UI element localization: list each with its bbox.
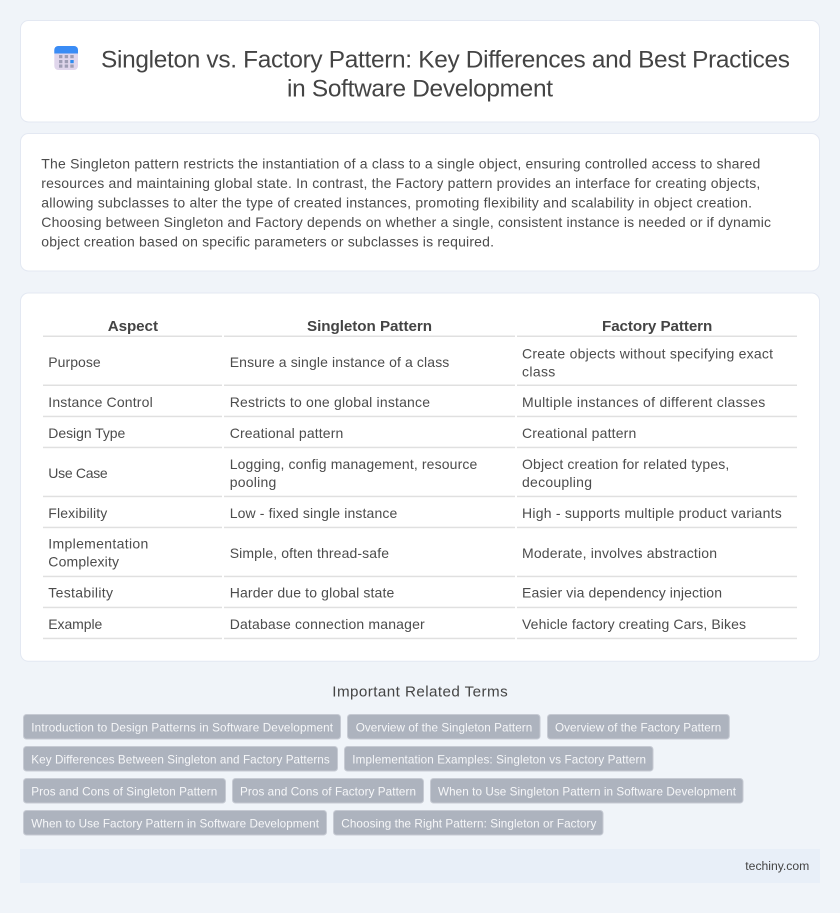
table row: Purpose: Ensure a single instance of a class xyxy=(230,354,449,370)
tag: Implementation Examples: Singleton vs Factory Pattern xyxy=(352,753,646,766)
table row: Use Case xyxy=(43,456,797,497)
table row: Flexibility: High - supports multiple product variants xyxy=(522,505,782,521)
footer bar xyxy=(20,849,820,883)
table row: Testability: Easier via dependency injection xyxy=(522,585,722,601)
table row: Example: Vehicle factory creating Cars, Bikes xyxy=(522,616,746,632)
tag: Pros and Cons of Factory Pattern xyxy=(240,785,416,798)
panel: related term tags xyxy=(24,714,743,835)
table row: Purpose xyxy=(43,345,797,386)
table row: Purpose: Purpose xyxy=(48,354,101,370)
text block: summary paragraph xyxy=(41,155,771,249)
table row: Design Type: Creational pattern xyxy=(230,425,343,441)
table row: Example xyxy=(43,616,797,639)
table row: Implementation Complexity: Moderate, involves abstraction xyxy=(522,545,717,561)
tag: When to Use Singleton Pattern in Software Development xyxy=(438,785,737,798)
icon: calendar xyxy=(54,46,78,70)
table row: Implementation Complexity: Complexity xyxy=(48,554,119,570)
tag xyxy=(430,778,743,803)
text block: summary paragraph: resources and maintaining global state. In contrast, the Factory pattern provides an interface for creating objects, xyxy=(41,175,760,191)
text block: summary paragraph: object creation based on specific parameters or subclasses is required. xyxy=(41,233,494,249)
tag xyxy=(24,714,340,739)
panel: title card xyxy=(20,20,820,122)
table header: Singleton Pattern xyxy=(307,318,432,335)
title: in Software Development xyxy=(287,76,553,102)
table header: Aspect xyxy=(108,318,158,335)
tag xyxy=(24,746,338,771)
table row: Instance Control xyxy=(43,394,797,417)
tag xyxy=(348,714,540,739)
table row: Testability xyxy=(43,585,797,608)
title: Singleton vs. Factory Pattern: Key Differences and Best Practices xyxy=(101,46,790,74)
table row: Testability: Testability xyxy=(48,585,113,601)
tag: Overview of the Singleton Pattern xyxy=(356,721,532,734)
tag: Pros and Cons of Singleton Pattern xyxy=(31,785,217,798)
table row: Use Case: decoupling xyxy=(522,474,592,490)
tag xyxy=(548,714,729,739)
text block: summary paragraph: allowing subclasses to alter the type of created instances, promoting flexibility and scalability in object creation. xyxy=(41,194,752,210)
heading: related terms: Important Related Terms xyxy=(332,684,508,701)
table row: Use Case: Object creation for related types, xyxy=(522,456,729,472)
table row: Example: Database connection manager xyxy=(230,616,425,632)
footer source label: techiny.com xyxy=(745,859,809,873)
panel: comparison table xyxy=(20,293,820,661)
table row: Use Case: Logging, config management, resource xyxy=(230,456,478,472)
tag: Choosing the Right Pattern: Singleton or Factory xyxy=(341,817,596,830)
tag: Introduction to Design Patterns in Software Development xyxy=(31,721,334,734)
table row: Implementation Complexity: Implementation xyxy=(48,536,148,552)
tag xyxy=(344,746,653,771)
table row: Purpose: class xyxy=(522,363,555,379)
table row: Design Type xyxy=(43,425,797,448)
text block: summary paragraph: Choosing between Singleton and Factory depends on whether a single, consistent instance is needed or if dynamic xyxy=(41,214,771,230)
table row: Design Type: Design Type xyxy=(48,425,126,441)
table header: Factory Pattern xyxy=(602,318,712,335)
table row: Purpose: Create objects without specifying exact xyxy=(522,345,773,361)
tag xyxy=(24,810,326,835)
table row: Flexibility xyxy=(43,505,797,528)
tag: When to Use Factory Pattern in Software Development xyxy=(31,817,320,830)
table row: Design Type: Creational pattern xyxy=(522,425,636,441)
tag xyxy=(24,778,226,803)
tag xyxy=(232,778,424,803)
table row: Flexibility: Flexibility xyxy=(48,505,107,521)
table row: Implementation Complexity xyxy=(43,536,797,577)
table row: Implementation Complexity: Simple, often thread-safe xyxy=(230,545,389,561)
table row: Use Case: Use Case xyxy=(48,465,108,481)
tag: Key Differences Between Singleton and Factory Patterns xyxy=(31,753,330,766)
table header xyxy=(43,318,797,337)
table row: Instance Control: Instance Control xyxy=(48,394,153,410)
title xyxy=(101,46,790,102)
table row: Instance Control: Multiple instances of different classes xyxy=(522,394,765,410)
table row: Use Case: pooling xyxy=(230,474,276,490)
text block: summary paragraph: The Singleton pattern restricts the instantiation of a class to a single object, ensuring controlled access to shared xyxy=(41,155,760,171)
table row: Instance Control: Restricts to one global instance xyxy=(230,394,430,410)
tag xyxy=(334,810,603,835)
panel: summary text xyxy=(20,134,820,271)
tag: Overview of the Factory Pattern xyxy=(555,721,721,734)
table row: Example: Example xyxy=(48,616,103,632)
table row: Testability: Harder due to global state xyxy=(230,585,395,601)
table row: Flexibility: Low - fixed single instance xyxy=(230,505,398,521)
